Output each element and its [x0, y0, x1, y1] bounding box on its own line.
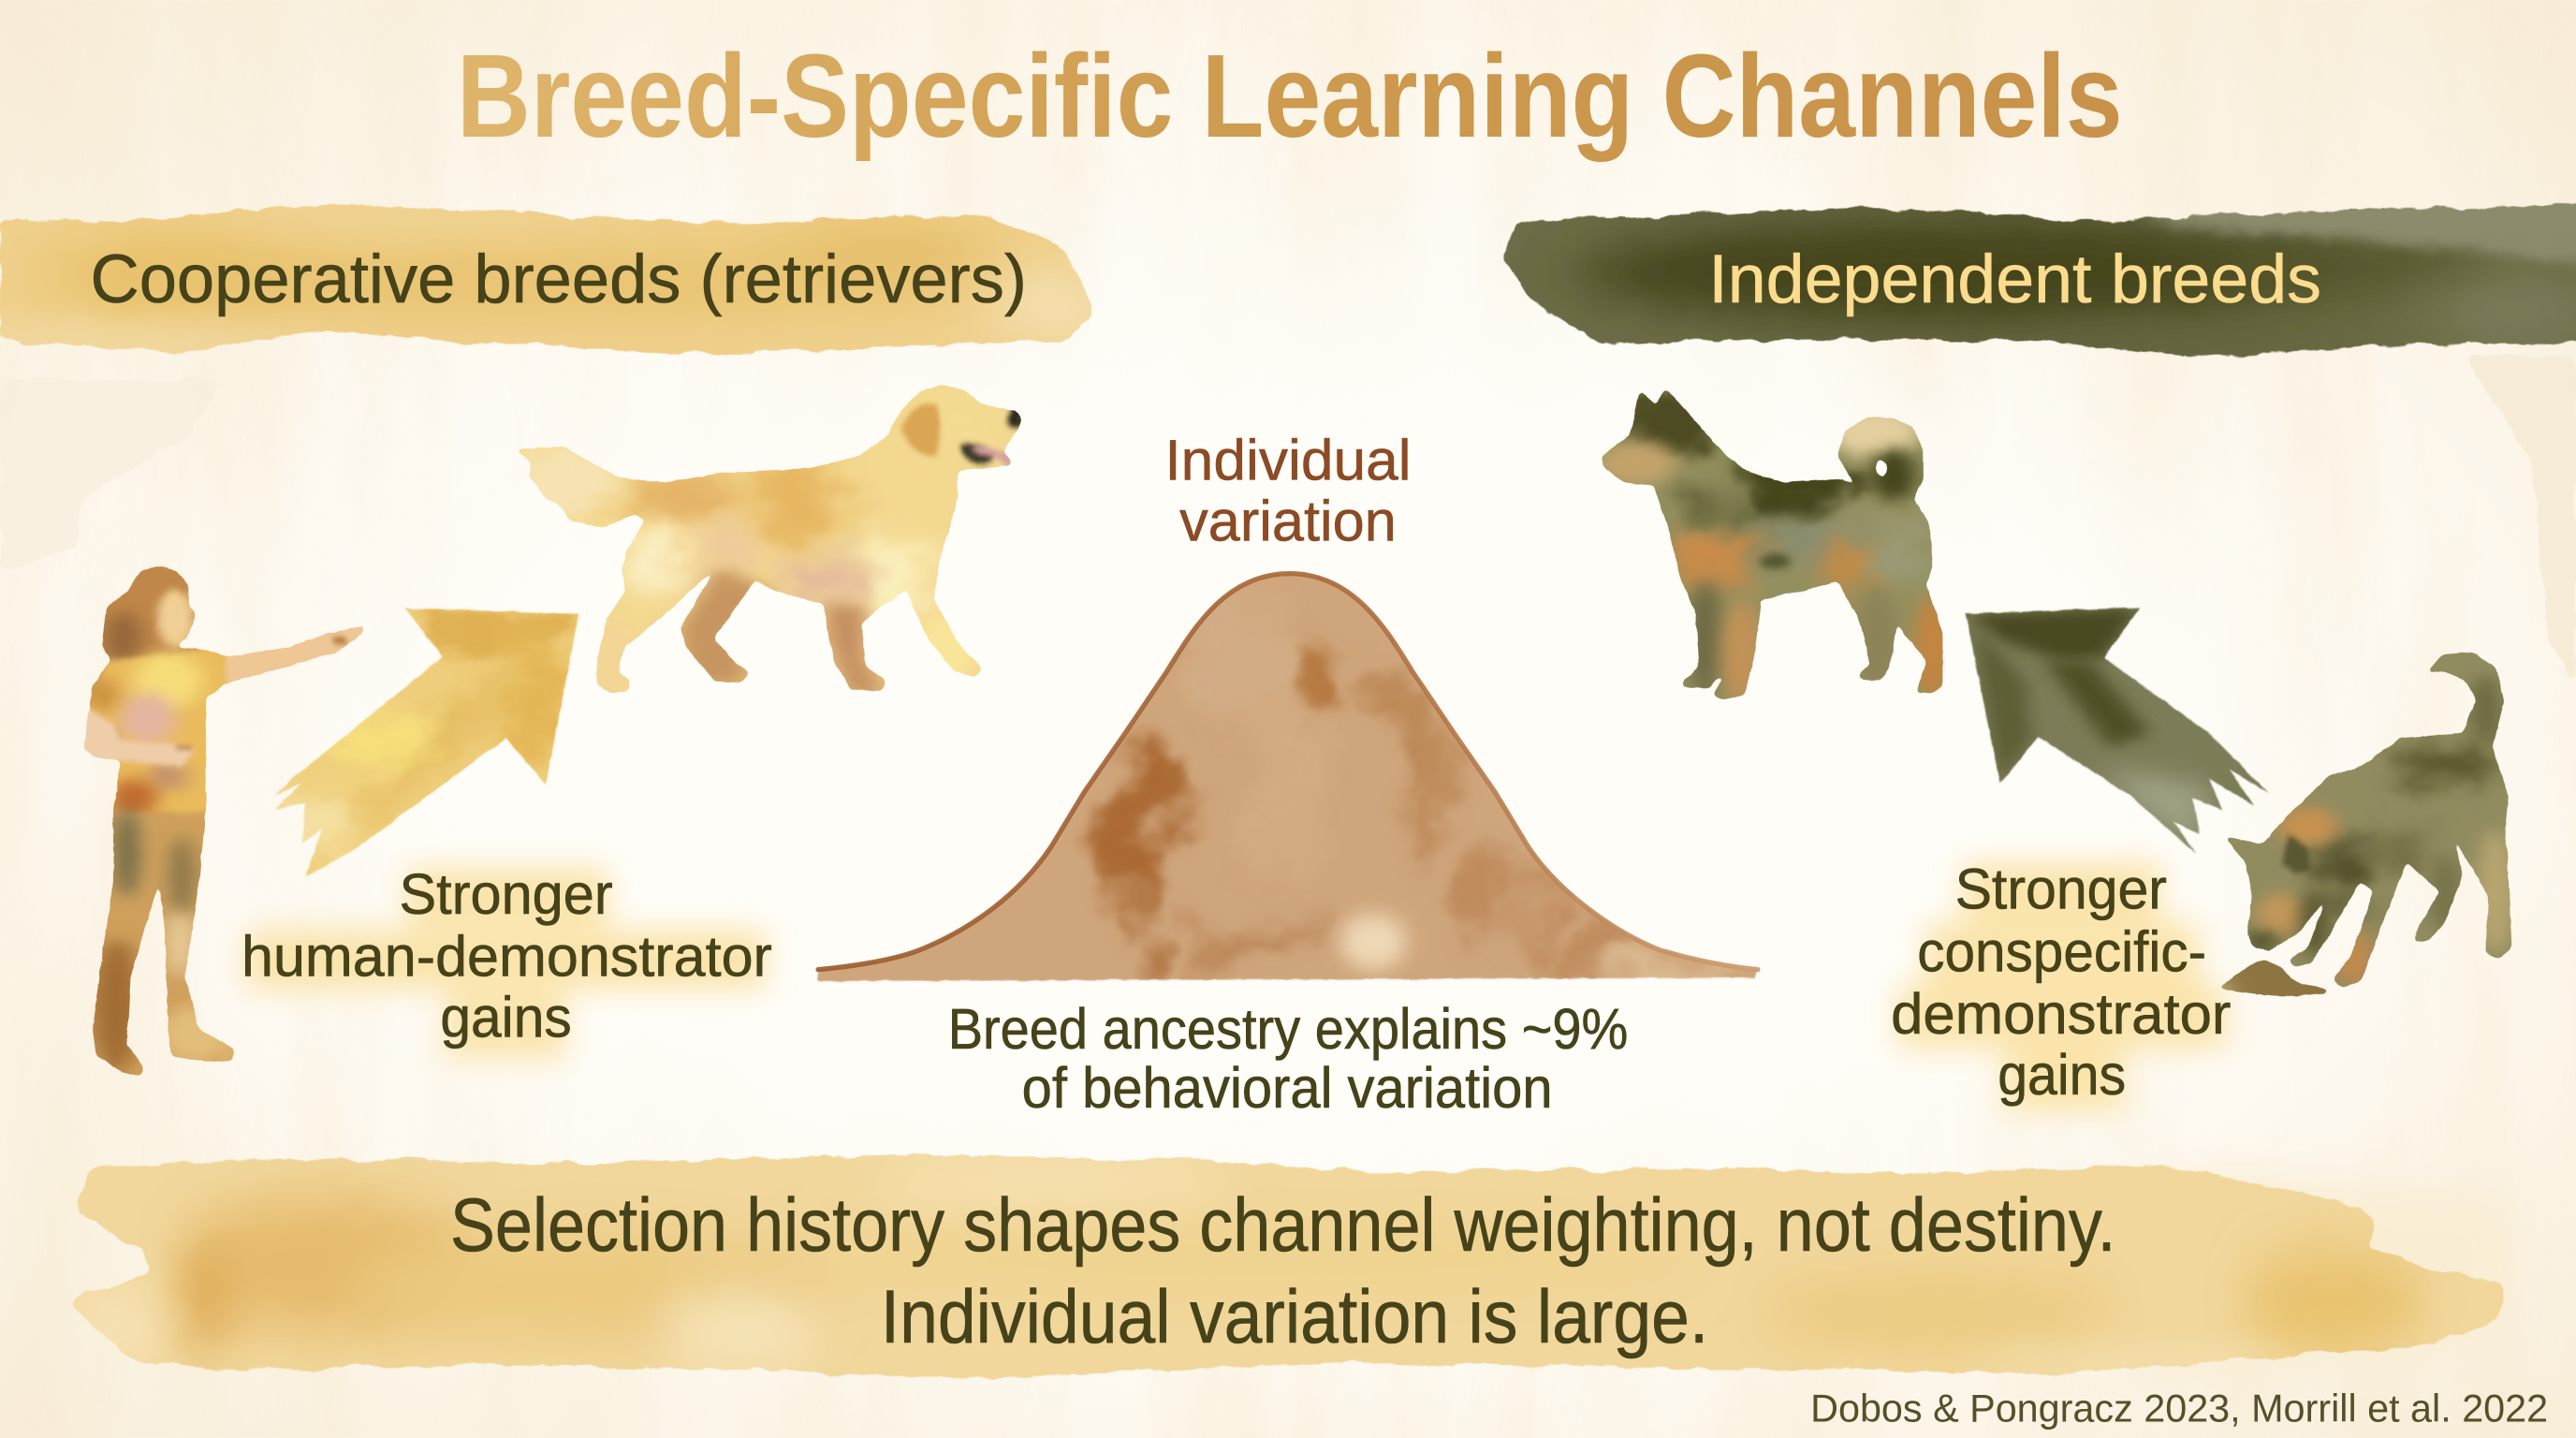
takeaway banner: Individual variation is large.	[881, 1275, 1708, 1359]
label: individual variation: Individual	[1164, 429, 1412, 493]
label: stronger human-demonstrator gains: human-demonstrator	[242, 925, 772, 990]
banner: cooperative breeds	[0, 200, 1117, 360]
caption: breed ancestry: Breed ancestry explains ~9%	[948, 997, 1628, 1062]
caption: breed ancestry: of behavioral variation	[1022, 1056, 1553, 1121]
human demonstrator figure	[84, 565, 363, 1076]
banner label: Cooperative breeds (retrievers)	[91, 240, 1027, 317]
dirt mound	[2216, 961, 2331, 996]
independent dog silhouette	[1590, 380, 1959, 705]
arrow: human to retriever	[261, 599, 591, 886]
label: individual variation: variation	[1179, 490, 1397, 554]
label: stronger conspecific-demonstrator gains: Stronger	[1955, 858, 2167, 922]
label: stronger human-demonstrator gains: gains	[440, 986, 572, 1050]
bell outline	[818, 574, 1758, 970]
caption: breed ancestry	[948, 997, 1628, 1121]
banner label: Independent breeds	[1708, 240, 2321, 317]
demonstrator forearm	[83, 710, 195, 767]
banner wash	[0, 200, 1117, 360]
label glow	[246, 868, 766, 1058]
bell curve	[805, 559, 1775, 986]
label glow	[1897, 863, 2226, 1111]
banner wash	[1479, 200, 2576, 362]
label: stronger conspecific-demonstrator gains: gains	[1998, 1043, 2126, 1108]
label: individual variation	[1164, 429, 1412, 554]
dog ear	[902, 404, 940, 456]
dog nose	[1006, 410, 1020, 429]
retriever dog silhouette	[508, 380, 1030, 699]
takeaway banner	[50, 1152, 2530, 1383]
takeaway text: Selection history shapes channel weighting, not destiny.	[450, 1183, 2116, 1268]
dog mouth and tongue	[959, 443, 1012, 465]
title: Breed-Specific Learning Channels	[457, 30, 2123, 162]
label: stronger conspecific-demonstrator gains: demonstrator	[1891, 982, 2231, 1047]
label: stronger conspecific-demonstrator gains	[1891, 858, 2231, 1111]
dog ear	[2281, 833, 2311, 874]
pale outer wash	[2136, 1170, 2513, 1377]
label: stronger human-demonstrator gains: Stronger	[399, 862, 613, 927]
banner: independent breeds	[1479, 200, 2576, 362]
banner wash	[50, 1152, 2530, 1383]
digging dog silhouette	[2216, 647, 2525, 996]
label: stronger human-demonstrator gains	[242, 862, 772, 1058]
label: stronger conspecific-demonstrator gains: conspecific-	[1917, 919, 2206, 984]
citation: Dobos & Pongracz 2023, Morrill et al. 2022	[1810, 1386, 2548, 1430]
arrow: conspecific to independent dog	[1959, 604, 2275, 858]
